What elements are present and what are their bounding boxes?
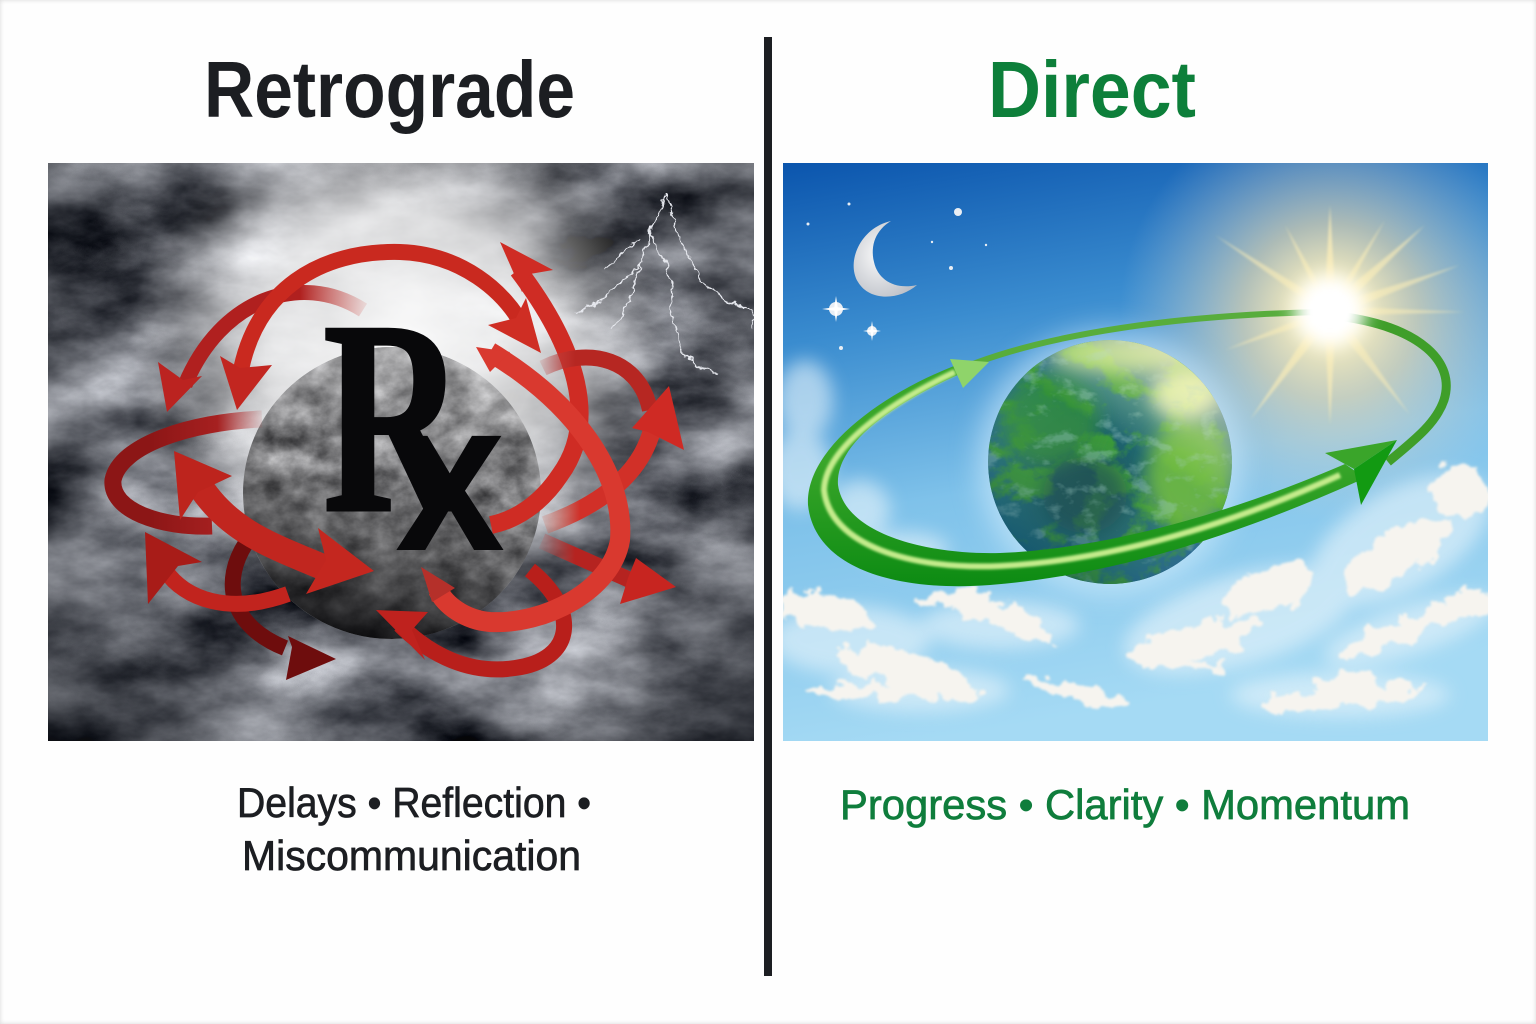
arrow: right vertical arc [491, 242, 580, 525]
arrow: lower dark arc [233, 543, 336, 680]
arrow: right upper arc [543, 357, 684, 525]
green orbit arrow [808, 312, 1446, 586]
earth globe [978, 330, 1242, 594]
clouds [775, 462, 1492, 716]
caption: direct keywords: Progress • Clarity • Momentum [840, 781, 1410, 828]
orbit: highlight [824, 372, 1340, 566]
orbit: band [808, 366, 1365, 586]
vertical divider [764, 37, 772, 976]
storm clouds [48, 163, 754, 741]
moon sphere [240, 345, 545, 645]
red arrows [113, 242, 684, 680]
stars [806, 202, 987, 350]
Rx symbol [325, 328, 504, 550]
caption: retrograde keywords: Delays • Reflection • [237, 779, 591, 826]
arrow: bottom loop [376, 570, 564, 669]
arrowhead: light [950, 359, 989, 388]
crescent moon [854, 221, 917, 297]
caption: retrograde keywords [237, 779, 591, 879]
sun core [1294, 275, 1366, 347]
arrow: large top arc [220, 252, 541, 410]
arrow: upper left arc [158, 292, 363, 412]
title: Retrograde: Retrograde [204, 45, 575, 134]
title: Direct: Direct [988, 45, 1196, 134]
soft cloud haze [768, 360, 1512, 717]
panel: direct sky scene [783, 163, 1488, 741]
arrow: central double arrow [174, 451, 374, 594]
Rx symbol: x [395, 354, 505, 596]
Rx symbol: R [323, 264, 467, 570]
arrow: left loop [113, 419, 262, 526]
caption: retrograde keywords: Miscommunication [242, 832, 581, 879]
orbit: right arc [1345, 317, 1446, 462]
sun rays [1215, 205, 1465, 425]
arrow: lower left double arrow [145, 532, 288, 604]
arrow: large right sweep [421, 347, 620, 622]
orbit: upper arc [965, 312, 1320, 367]
panel: retrograde storm scene [48, 163, 754, 741]
arrowhead: right [1325, 440, 1397, 505]
lightning bolt [575, 195, 752, 375]
arrow: right straight [542, 541, 676, 604]
sun glow [1132, 163, 1488, 498]
sky [783, 163, 1488, 741]
